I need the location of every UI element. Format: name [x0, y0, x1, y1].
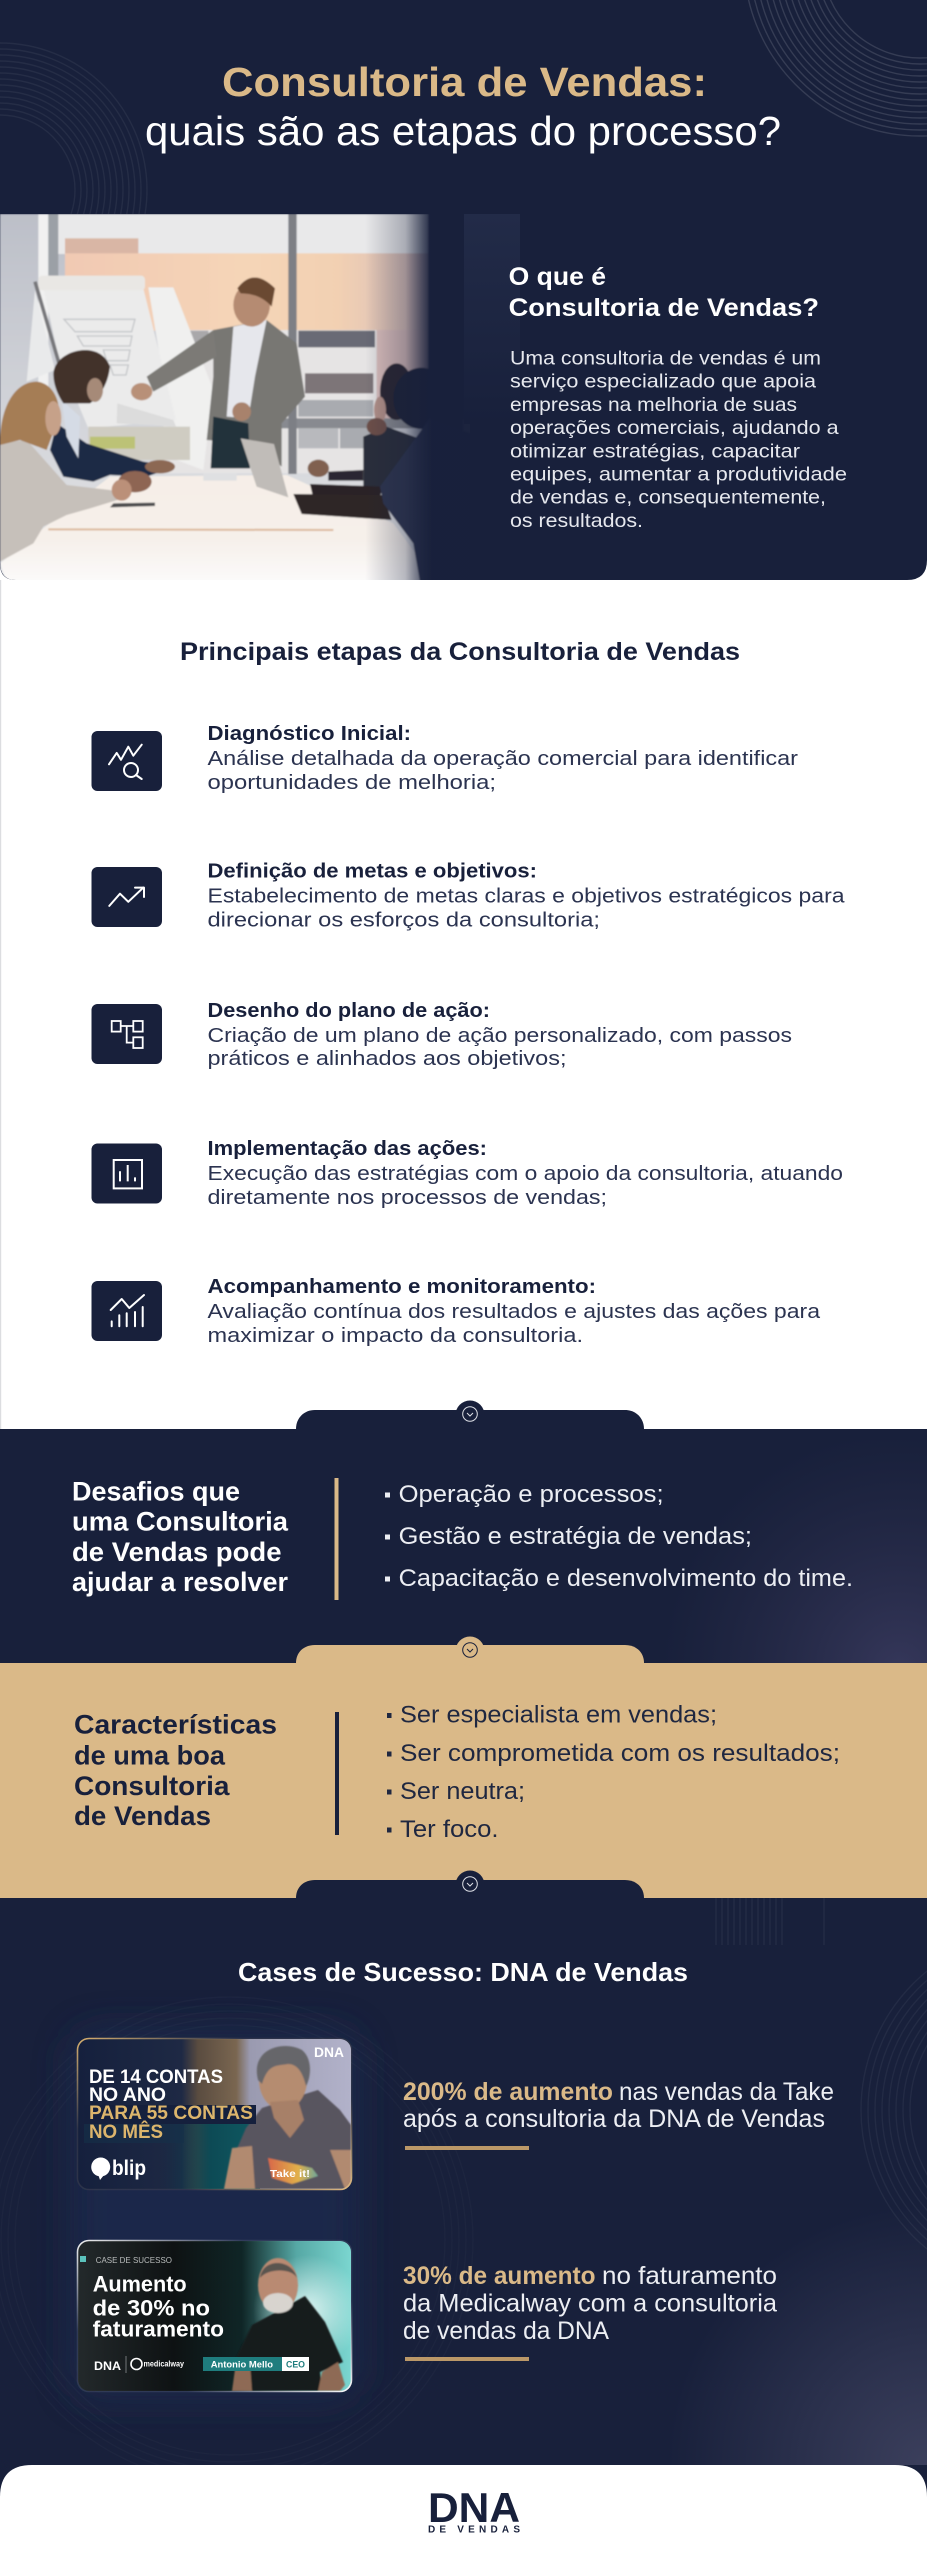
- step text: Estabelecimento de metas claras e objetivos estratégicos para: [208, 886, 845, 908]
- panel: main steps background: [0, 560, 927, 1430]
- case 1 rule: [405, 2146, 529, 2150]
- challenges heading: de Vendas pode: [72, 1537, 282, 1567]
- heading: main steps: Principais etapas da Consultoria de Vendas: [180, 638, 740, 666]
- qualities list: Ser especialista em vendas;: [400, 1702, 717, 1729]
- title: Consultoria de Vendas:: [222, 59, 707, 105]
- case 1 result text: nas vendas da Take: [619, 2078, 834, 2106]
- logo: DNA de Vendas: DNA: [428, 2484, 520, 2531]
- step text: diretamente nos processos de vendas;: [208, 1187, 607, 1209]
- logo: DNA de Vendas: DE VENDAS: [428, 2524, 520, 2536]
- challenges heading: ajudar a resolver: [72, 1567, 288, 1597]
- panel paragraph: de vendas e, consequentemente,: [510, 487, 826, 509]
- qualities list: [387, 1702, 840, 1843]
- panel heading: O que é: [509, 263, 606, 291]
- icon: chart with magnifier: [92, 731, 162, 791]
- step text: Criação de um plano de ação personalizado, com passos: [208, 1025, 792, 1047]
- case card 2: Medicalway thumbnail: faturamento: [93, 2317, 224, 2342]
- footer panel: [0, 2465, 927, 2560]
- step text: Avaliação contínua dos resultados e ajustes das ações para: [208, 1301, 821, 1323]
- challenges divider: [334, 1478, 338, 1600]
- case card 1: Blip thumbnail: NO ANO: [89, 2085, 166, 2106]
- case card 1: Blip thumbnail: DE 14 CONTAS: [89, 2067, 223, 2088]
- challenges heading: [72, 1476, 289, 1597]
- corner glow and faint arcs: [0, 1898, 927, 2483]
- case card 1: Blip thumbnail: [78, 2038, 352, 2190]
- panel: challenges: [0, 1400, 927, 1663]
- panel: what is sales consulting: [0, 214, 847, 582]
- challenges heading: Desafios que: [72, 1476, 240, 1506]
- icon: flow blocks: [92, 1004, 162, 1064]
- qualities heading: de uma boa: [74, 1741, 226, 1771]
- lighter window panel: [464, 214, 520, 424]
- title: quais são as etapas do processo?: [145, 108, 781, 154]
- tab with chevron: [296, 1870, 644, 1900]
- step text: Análise detalhada da operação comercial para identificar: [208, 748, 798, 770]
- case card 2: Medicalway thumbnail: DNA: [94, 2359, 121, 2373]
- qualities heading: [74, 1710, 277, 1831]
- tab with chevron: [296, 1636, 644, 1666]
- photo fade into navy: [365, 214, 470, 580]
- case card 2: Medicalway thumbnail: [78, 2240, 363, 2392]
- case card 1: Blip thumbnail: DNA: [314, 2044, 344, 2060]
- step text: [208, 723, 798, 794]
- case card 2: Medicalway thumbnail: Antonio Mello: [211, 2360, 273, 2370]
- case 1 result text: [403, 2078, 834, 2133]
- icon: bars with line: [92, 1281, 162, 1341]
- step text: Implementação das ações:: [208, 1138, 487, 1160]
- step text: [208, 1138, 843, 1209]
- panel paragraph: serviço especializado que apoia: [510, 371, 816, 393]
- case 2 result text: 30% de aumento: [403, 2262, 596, 2290]
- step text: práticos e alinhados aos objetivos;: [208, 1048, 566, 1070]
- step 3: action plan: [92, 1000, 792, 1070]
- step text: [208, 1000, 792, 1070]
- qualities heading: Consultoria: [74, 1771, 231, 1801]
- panel paragraph: os resultados.: [510, 510, 643, 532]
- case 2 result text: de vendas da DNA: [403, 2317, 609, 2345]
- challenges list: Operação e processos;: [399, 1481, 664, 1508]
- panel heading: Consultoria de Vendas?: [509, 294, 819, 322]
- case 1 result text: após a consultoria da DNA de Vendas: [403, 2105, 825, 2133]
- step text: [208, 860, 845, 932]
- challenges list: Capacitação e desenvolvimento do time.: [399, 1565, 853, 1592]
- panel paragraph: operações comerciais, ajudando a: [510, 417, 839, 439]
- qualities list: Ter foco.: [400, 1816, 498, 1843]
- panel: success cases: [0, 1870, 927, 2483]
- decorative arcs: header: [0, 0, 927, 214]
- case 2 rule: [405, 2357, 529, 2361]
- step text: Desenho do plano de ação:: [208, 1000, 490, 1022]
- case card 1: Blip thumbnail: blip: [112, 2157, 146, 2180]
- icon: trending arrow: [92, 867, 162, 927]
- panel paragraph: empresas na melhoria de suas: [510, 394, 797, 416]
- title: [145, 59, 781, 154]
- case card 1: Blip thumbnail: Take it!: [270, 2169, 310, 2180]
- step text: oportunidades de melhoria;: [208, 772, 496, 794]
- qualities heading: de Vendas: [74, 1801, 211, 1831]
- step text: Acompanhamento e monitoramento:: [208, 1276, 596, 1298]
- step 5: monitoring: [92, 1276, 821, 1347]
- qualities list: Ser comprometida com os resultados;: [400, 1740, 840, 1767]
- case 2 result text: [403, 2262, 777, 2345]
- step 1: initial diagnosis: [92, 723, 798, 794]
- case card 2: Medicalway thumbnail: CEO: [286, 2360, 305, 2370]
- case card 2: Medicalway thumbnail: de 30% no: [93, 2296, 210, 2321]
- step text: Execução das estratégias com o apoio da consultoria, atuando: [208, 1163, 843, 1185]
- case 2 result text: da Medicalway com a consultoria: [403, 2290, 777, 2318]
- panel paragraph: equipes, aumentar a produtividade: [510, 464, 847, 486]
- step text: [208, 1276, 821, 1347]
- tab with chevron: [296, 1400, 644, 1430]
- step text: maximizar o impacto da consultoria.: [208, 1325, 583, 1347]
- step text: direcionar os esforços da consultoria;: [208, 910, 600, 932]
- case 2 result text: no faturamento: [602, 2262, 777, 2290]
- case card 2: Medicalway thumbnail: medicalway: [144, 2360, 184, 2368]
- panel: qualities: [0, 1636, 927, 1898]
- light glow: [640, 1440, 927, 1663]
- step 4: implementation: [92, 1138, 843, 1209]
- qualities heading: Características: [74, 1710, 277, 1740]
- panel paragraph: Uma consultoria de vendas é um: [510, 348, 821, 370]
- panel heading: [509, 263, 819, 322]
- cases heading: Cases de Sucesso: DNA de Vendas: [238, 1957, 688, 1987]
- challenges list: [385, 1481, 853, 1592]
- case card 2: Medicalway thumbnail: CASE DE SUCESSO: [96, 2255, 172, 2265]
- panel paragraph: otimizar estratégias, capacitar: [510, 440, 801, 462]
- step text: Diagnóstico Inicial:: [208, 723, 411, 745]
- case card 1: Blip thumbnail: NO MÊS: [89, 2121, 163, 2143]
- panel paragraph: [510, 348, 847, 532]
- qualities list: Ser neutra;: [400, 1778, 525, 1805]
- step 2: goals and objectives: [92, 860, 845, 932]
- step text: Definição de metas e objetivos:: [208, 860, 537, 882]
- case card 1: Blip thumbnail: PARA 55 CONTAS: [89, 2103, 253, 2124]
- qualities divider: [335, 1712, 339, 1835]
- challenges heading: uma Consultoria: [72, 1506, 289, 1536]
- case 1 result text: 200% de aumento: [403, 2078, 613, 2106]
- icon: framed bars: [92, 1144, 162, 1204]
- challenges list: Gestão e estratégia de vendas;: [399, 1523, 752, 1550]
- case card 2: Medicalway thumbnail: Aumento: [93, 2272, 187, 2297]
- photo: team meeting: [0, 214, 429, 580]
